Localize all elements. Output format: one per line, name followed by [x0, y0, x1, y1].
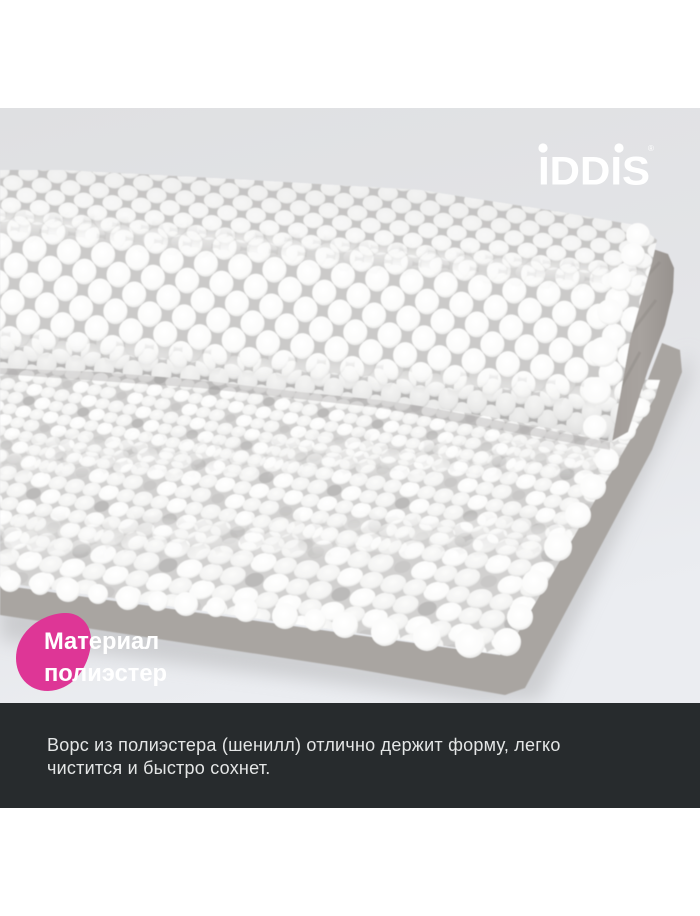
photo: chenille bath mat: [0, 108, 700, 703]
rolled mat edge: [606, 248, 674, 442]
flat mat border: [0, 343, 682, 695]
caption text: чистится и быстро сохнет.: [47, 758, 270, 778]
badge text: полиэстер: [44, 661, 167, 687]
logo: iddis: ®: [648, 144, 654, 153]
rolled mat underside shadow: [0, 366, 610, 450]
badge text: [44, 629, 167, 687]
pink badge blob: [16, 613, 91, 691]
rolled mat pile: [0, 170, 657, 442]
flat mat pile: [0, 368, 660, 658]
logo: iddis: IDDIS: [538, 150, 650, 194]
badge text: Материал: [44, 629, 159, 655]
photo background: [0, 108, 700, 703]
dark caption band: [0, 703, 700, 808]
caption text: [47, 735, 561, 778]
mat shadow: [0, 350, 690, 703]
caption text: Ворс из полиэстера (шенилл) отлично держит форму, легко: [47, 735, 561, 755]
